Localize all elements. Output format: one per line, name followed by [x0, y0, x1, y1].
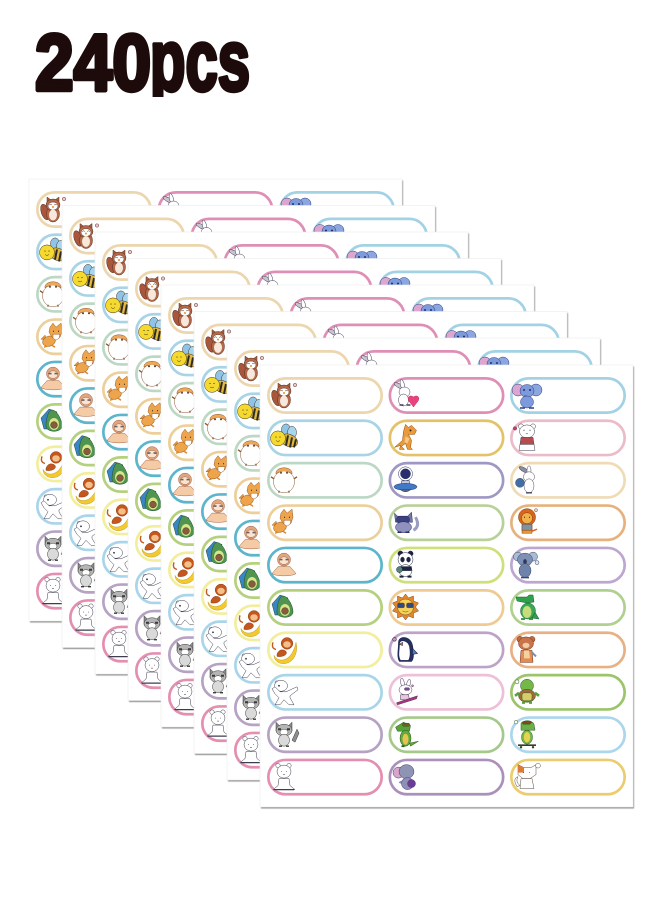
label: turtle: [511, 675, 625, 709]
label: sitting white bear: [268, 760, 382, 794]
label: bee: [268, 421, 382, 455]
label: koala: [511, 548, 625, 582]
label: dinosaur on skateboard: [511, 718, 625, 752]
sticker sheet 8 (front): [260, 365, 634, 808]
label: brown bear: [511, 633, 625, 667]
label: crocodile with sunglasses: [390, 718, 503, 752]
sticker sheet 3: [95, 232, 469, 676]
label: blue elephant: [511, 378, 625, 413]
label: sun with sunglasses: [390, 590, 503, 625]
label: purple elephant: [390, 760, 503, 794]
title: 240pcs: pcs: [150, 13, 250, 109]
label: crocodile: [511, 590, 625, 625]
label: panda: [390, 548, 503, 582]
label: dabbing bear: [268, 675, 382, 709]
label: white bear: [511, 421, 625, 455]
label: raccoon: [390, 506, 503, 540]
label: monkey on banana: [268, 633, 382, 667]
label: sloth: [268, 548, 382, 582]
label: rabbit with heart: [390, 378, 503, 413]
label: grey raccoon: [268, 718, 382, 752]
label: orange dinosaur: [390, 421, 503, 455]
label: hamster: [268, 463, 382, 497]
label: bunny on skateboard: [390, 675, 503, 709]
label: rabbit with bag: [511, 463, 625, 497]
label: avocado: [268, 590, 382, 625]
label: calico cat: [511, 760, 625, 794]
sticker sheet 1 (rearmost): [29, 179, 403, 622]
sticker sheet 2: [62, 206, 436, 649]
title: 240pcs: 240: [35, 18, 151, 107]
sticker sheet 5: [161, 285, 535, 728]
label: owl: [268, 378, 382, 413]
label: lion reading: [511, 506, 625, 540]
sticker sheet 7: [227, 338, 601, 782]
label: penguin: [390, 633, 503, 667]
sticker sheet 6: [194, 312, 568, 755]
label: astronaut on saucer: [390, 463, 503, 497]
label: shiba dog: [268, 506, 382, 540]
sticker sheet 4: [128, 258, 502, 702]
